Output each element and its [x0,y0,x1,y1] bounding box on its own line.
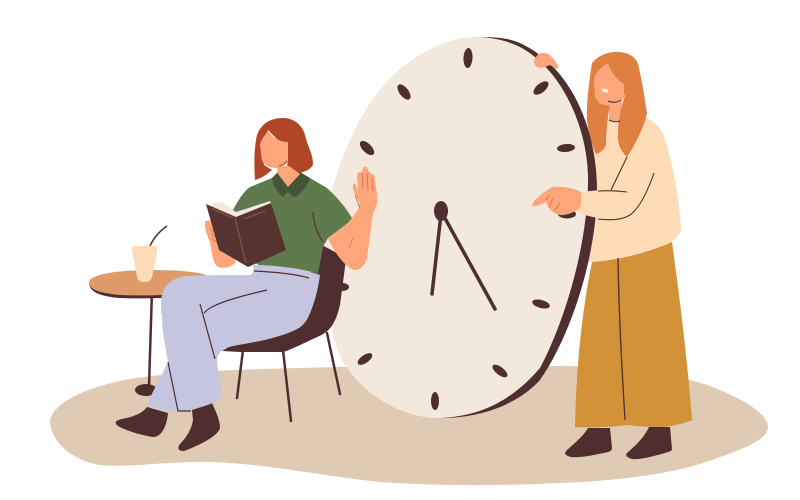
woman seated: shirt fold [313,212,323,242]
woman standing: left shoe [565,428,612,457]
book [206,201,286,267]
book spine and marks [211,208,265,263]
woman standing: sleeve [578,155,660,220]
woman seated: finger lines [349,173,373,248]
clock rim [440,37,597,418]
woman seated: trousers [147,265,320,412]
book cover [206,203,286,267]
table base [135,384,157,396]
table leg [149,290,152,386]
woman seated: shirt [225,178,352,274]
clock [326,37,597,418]
woman standing: hand on clock [534,53,559,69]
woman seated: collar [272,172,310,197]
woman standing: sweater body [570,117,681,262]
woman seated: neck [277,166,300,187]
woman standing: pointing hand [532,187,581,215]
woman seated: left shoe [116,407,168,437]
clock tick marks [356,48,576,410]
woman seated: hair [254,118,313,180]
woman seated: face [260,131,288,168]
woman standing: smile and collar lines [608,100,621,122]
woman standing: trouser crease [618,258,625,420]
table top shadow [89,280,205,298]
woman standing: face [594,63,624,105]
chair seat and back [222,245,346,352]
woman standing: trousers [575,242,692,427]
chair tick behind [340,206,352,214]
woman seated: finger lines on holding hand [210,229,219,243]
woman seated: raised arm and hand [328,167,377,270]
woman standing: right shoe [626,427,672,459]
woman standing: eye highlight [601,88,609,93]
chair legs [237,333,340,421]
table top [89,270,206,295]
straw [150,226,167,246]
woman seated: chin line [279,161,287,166]
woman seated: holding hand [205,220,236,268]
clock face [326,37,588,418]
clock centre [434,201,448,221]
clock hands [432,211,495,309]
chair [222,245,349,421]
woman seated: right shoe [178,403,220,451]
woman seated: trouser lines [168,271,309,411]
cup [132,246,157,282]
ground shape [50,366,768,485]
book pages [212,201,272,219]
woman standing: sweater lines [598,157,654,220]
chair bump [335,283,349,291]
woman standing: neck [609,100,622,122]
woman standing: finger lines [546,195,560,210]
woman standing: hair [587,52,647,157]
table [89,226,206,396]
